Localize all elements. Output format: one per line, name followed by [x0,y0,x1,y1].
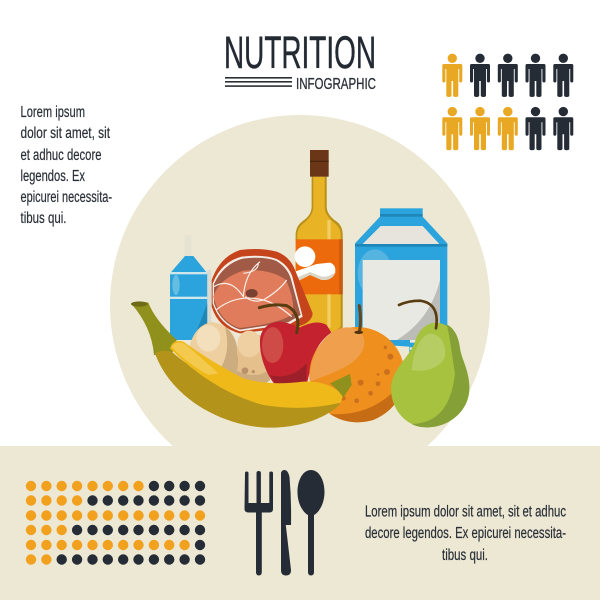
panel: background circle [110,115,490,495]
text block: left [20,104,112,227]
title: NUTRITION [224,27,376,78]
text block: left: epicurei necessita- [20,189,112,206]
icon: apple [259,305,331,389]
title: INFOGRAPHIC [296,76,376,93]
text block: bottom right [365,504,566,564]
chart: dot matrix [26,481,205,565]
title [224,27,376,93]
icon: small blue bottle [170,235,211,340]
icon: oil bottle [296,150,343,333]
icon: spoon [298,470,324,576]
text block: left: tibus qui. [20,210,66,227]
icon: potatoes [189,322,270,387]
icon: meat steak [212,249,313,333]
text block: left: et adhuc decore [20,147,102,164]
text block: left: Lorem ipsum [20,104,85,121]
icon: milk carton [355,208,447,354]
text block: left: legendos. Ex [20,168,85,185]
text block: left: dolor sit amet, sit [20,125,111,142]
illustration: food group [131,150,469,428]
icon: banana [131,301,352,428]
icon: fork [244,471,273,576]
icon: orange [309,306,405,422]
icon: knife [281,470,291,576]
pictogram: people row chart [442,54,573,150]
icon: pear [391,301,469,427]
icon: chicken bone [295,246,336,282]
text block: bottom right: tibus qui. [442,547,488,564]
panel: bottom band [0,446,600,600]
